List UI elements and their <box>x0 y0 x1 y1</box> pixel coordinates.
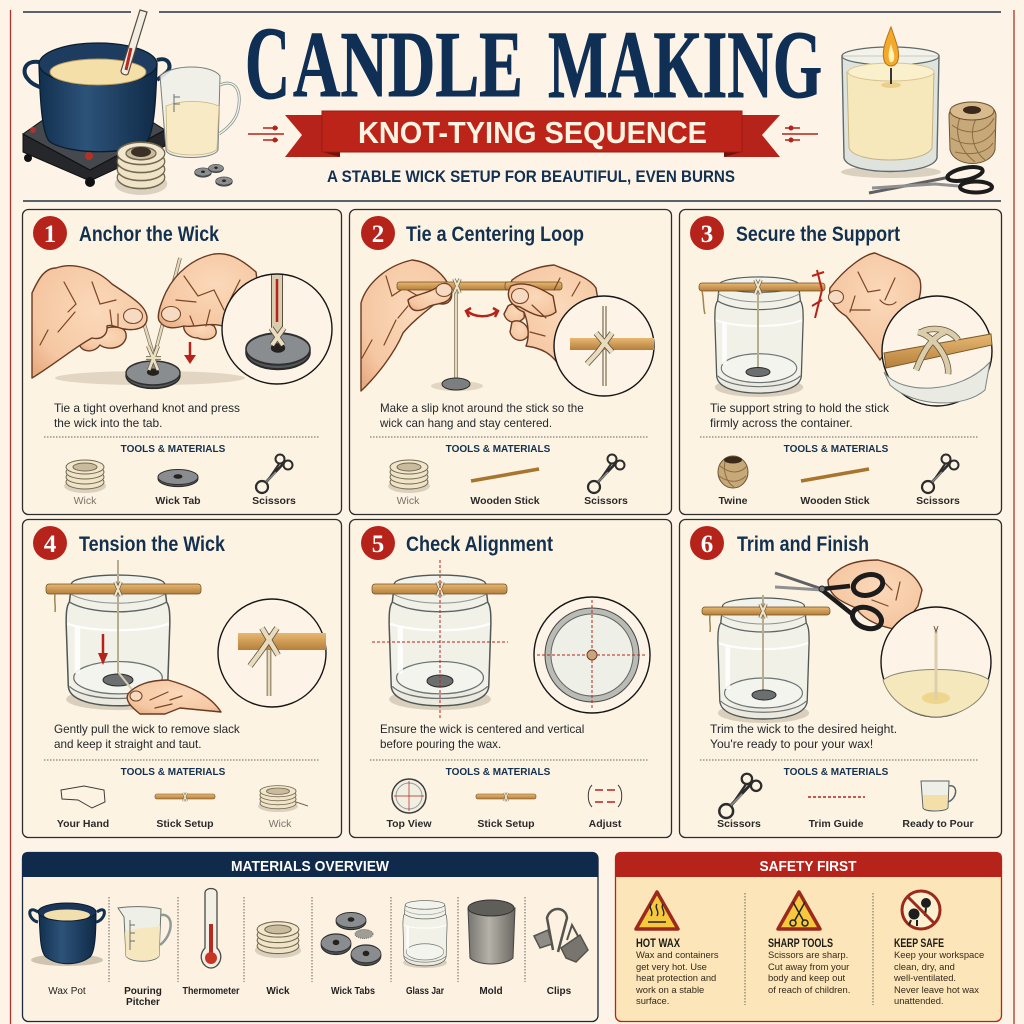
illustration: hands holding stick with hanging wick <box>361 260 600 391</box>
warning: sharp tools <box>768 892 850 995</box>
magnified detail: taut knot <box>218 599 326 707</box>
warning: keep safe: Never leave hot wax <box>894 984 979 995</box>
tool: ready to pour pitcher <box>902 781 974 830</box>
step number 1 <box>33 216 67 250</box>
warning: hot wax: Wax and containers <box>636 949 719 960</box>
instruction text: You're ready to pour your wax! <box>710 737 873 751</box>
panel 4 heading: Tension the Wick <box>79 533 225 556</box>
instruction text: Trim the wick to the desired height. <box>710 722 897 736</box>
warning: sharp tools: body and keep out <box>768 972 846 983</box>
material: wax pot: Wax Pot <box>48 986 86 997</box>
tool: wick tab <box>155 470 201 507</box>
material: pouring pitcher: Pouring <box>124 986 162 997</box>
instruction text: firmly across the container. <box>710 416 853 430</box>
material: clips <box>534 909 588 997</box>
tools heading: TOOLS & MATERIALS <box>121 767 226 778</box>
material: pouring pitcher: Pitcher <box>126 997 160 1008</box>
illustration: hands tying wick to tab <box>32 254 262 388</box>
instruction text: Gently pull the wick to remove slack <box>54 723 240 736</box>
tool: stick setup <box>476 793 536 830</box>
tool: ready to pour pitcher: Ready to Pour <box>902 818 974 830</box>
illustration: melting pot on hot plate with pitcher, wick spool and tabs <box>23 10 239 195</box>
magnified detail: trimmed wick in wax <box>881 607 991 717</box>
illustration: hand tying string <box>828 253 921 360</box>
tool: wick <box>64 460 106 507</box>
panel 1 heading: Anchor the Wick <box>79 223 219 246</box>
warning: hot wax: get very hot. Use <box>636 961 707 972</box>
step number 4: 4 <box>44 531 57 558</box>
tool: wick: Wick <box>269 818 292 830</box>
step number 6 <box>690 526 724 560</box>
panel 1: anchor the wick <box>22 210 342 514</box>
illustration: jar with trimmed wick <box>702 595 830 723</box>
tool: trim guide <box>808 797 865 830</box>
warning: keep safe: well-ventilated. <box>893 972 956 983</box>
tool: scissors: Scissors <box>916 495 960 507</box>
magnified detail: knot in tab <box>222 274 332 384</box>
warning: hot wax: heat protection and <box>636 972 716 983</box>
materials header bar <box>22 852 598 877</box>
step number 2: 2 <box>372 221 384 248</box>
panel 3 heading: Secure the Support <box>736 223 900 246</box>
step number 1: 1 <box>44 221 56 248</box>
tool: trim guide: Trim Guide <box>809 818 864 830</box>
instruction text: Tie a tight overhand knot and press <box>54 401 240 415</box>
panel 3: secure the support <box>680 210 1002 514</box>
instruction text: and keep it straight and taut. <box>54 738 202 751</box>
panel 6 heading: Trim and Finish <box>737 533 869 556</box>
material: thermometer <box>182 888 240 997</box>
warning: hot wax: HOT WAX <box>636 938 680 950</box>
step number 5 <box>361 526 395 560</box>
material: wick <box>255 922 301 997</box>
tools heading: TOOLS & MATERIALS <box>784 767 889 778</box>
title: MAKING <box>548 12 822 118</box>
panel 4: tension the wick <box>22 520 342 838</box>
tool: scissors <box>252 454 296 507</box>
step number 3 <box>690 216 724 250</box>
warning: sharp tools: Scissors are sharp. <box>768 949 848 960</box>
panel 5 heading: Check Alignment <box>406 533 553 556</box>
material: wax pot <box>30 903 104 997</box>
material: clips: Clips <box>547 986 572 997</box>
tool: wooden stick <box>470 469 540 507</box>
title <box>245 6 822 121</box>
title: ANDLE <box>293 13 523 117</box>
tool: stick setup: Stick Setup <box>477 818 535 830</box>
title: C <box>245 6 290 121</box>
panel 5: check alignment <box>350 520 672 838</box>
illustration: jar with alignment guides <box>372 560 508 718</box>
tool: scissors: Scissors <box>717 818 761 830</box>
tools heading: TOOLS & MATERIALS <box>446 444 551 455</box>
illustration: jar with stick <box>699 277 825 397</box>
materials header bar: MATERIALS OVERVIEW <box>231 858 390 875</box>
tool: twine <box>718 456 748 507</box>
step number 4 <box>33 526 67 560</box>
instruction text: Ensure the wick is centered and vertical <box>380 723 584 736</box>
tool: your hand: Your Hand <box>57 818 109 830</box>
red tie marks <box>812 270 824 318</box>
ribbon banner: knot-tying sequence <box>285 111 780 157</box>
tool: scissors <box>916 454 960 507</box>
warning: sharp tools: Cut away from your <box>768 961 849 972</box>
tool: top view: Top View <box>386 818 432 830</box>
material: pouring pitcher <box>118 907 171 1008</box>
red down arrow <box>189 342 191 356</box>
tool: scissors <box>584 454 628 507</box>
illustration: hand with scissors <box>775 560 922 633</box>
instruction text: Tie support string to hold the stick <box>710 401 890 415</box>
instruction text: the wick into the tab. <box>54 416 162 430</box>
tool: stick setup: Stick Setup <box>156 818 214 830</box>
tool: wick tab: Wick Tab <box>155 495 201 507</box>
illustration: jar with wick under tension <box>46 560 201 710</box>
warning: keep safe: unattended. <box>894 995 944 1006</box>
tools heading: TOOLS & MATERIALS <box>446 767 551 778</box>
tool: adjust <box>588 785 622 830</box>
material: mold: Mold <box>479 986 503 997</box>
warning: hot wax <box>635 892 719 1006</box>
step number 5: 5 <box>372 531 384 558</box>
step number 3: 3 <box>701 221 713 248</box>
panel 2: tie a centering loop <box>350 210 672 514</box>
warning: hot wax: surface. <box>636 995 669 1006</box>
tool: scissors <box>717 774 761 830</box>
step number 6: 6 <box>701 531 713 558</box>
step number 2 <box>361 216 395 250</box>
warning: keep safe: KEEP SAFE <box>894 938 944 950</box>
tools heading: TOOLS & MATERIALS <box>121 444 226 455</box>
material: thermometer: Thermometer <box>182 986 240 997</box>
illustration: hand pulling wick <box>118 672 221 714</box>
tool: wick <box>258 786 308 830</box>
panel 2 heading: Tie a Centering Loop <box>406 223 584 246</box>
red down arrow <box>102 634 104 654</box>
warning: sharp tools: SHARP TOOLS <box>768 938 833 950</box>
material: wick tabs <box>321 912 381 997</box>
magnified detail: top view of jar <box>534 597 650 713</box>
tools heading: TOOLS & MATERIALS <box>784 444 889 455</box>
instruction text: Make a slip knot around the stick so the <box>380 402 584 415</box>
tool: your hand <box>57 786 109 830</box>
magnified detail: slip knot <box>554 296 654 396</box>
warning: keep safe <box>893 891 984 1006</box>
instruction text: wick can hang and stay centered. <box>379 417 552 430</box>
tool: wooden stick: Wooden Stick <box>800 495 870 507</box>
ribbon side ornaments <box>248 126 818 142</box>
tool: wooden stick: Wooden Stick <box>470 495 540 507</box>
material: glass jar: Glass Jar <box>406 986 444 997</box>
red centering arrows <box>466 308 498 317</box>
warning: hot wax: work on a stable <box>635 984 704 995</box>
tool: scissors: Scissors <box>252 495 296 507</box>
tool: wick: Wick <box>74 495 97 507</box>
safety header bar: SAFETY FIRST <box>760 858 856 875</box>
safety header bar <box>615 852 1002 877</box>
warning: keep safe: Keep your workspace <box>894 949 984 960</box>
subtitle: A STABLE WICK SETUP FOR BEAUTIFUL, EVEN BURNS <box>327 167 735 186</box>
tool: wick <box>388 460 430 507</box>
ribbon banner: knot-tying sequence: KNOT-TYING SEQUENCE <box>358 115 707 150</box>
tool: top view <box>386 779 432 830</box>
tool: wick: Wick <box>397 495 420 507</box>
instruction text: before pouring the wax. <box>380 738 501 751</box>
magnified detail: support knot on jar <box>882 296 992 406</box>
tool: wooden stick <box>800 469 870 507</box>
tool: stick setup <box>155 793 215 830</box>
tool: adjust: Adjust <box>589 818 622 830</box>
material: wick tabs: Wick Tabs <box>331 986 375 997</box>
material: wick: Wick <box>266 986 290 997</box>
panel: safety first <box>615 852 1002 1022</box>
illustration: lit candle, twine and scissors <box>841 27 996 193</box>
tool: twine: Twine <box>719 495 748 507</box>
material: mold <box>468 900 515 997</box>
tool: scissors: Scissors <box>584 495 628 507</box>
panel 6: trim and finish <box>680 520 1002 838</box>
warning: sharp tools: of reach of children. <box>768 984 850 995</box>
material: glass jar <box>403 901 447 997</box>
panel: materials overview <box>22 852 598 1022</box>
warning: keep safe: clean, dry, and <box>894 961 955 972</box>
